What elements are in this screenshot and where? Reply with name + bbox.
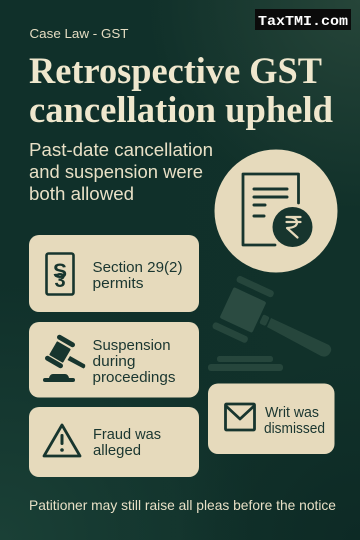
title: cancellation upheld xyxy=(29,90,333,131)
icon: gavel xyxy=(43,334,85,382)
title: Retrospective GST xyxy=(29,51,322,92)
icon: section symbol: 3 xyxy=(54,270,66,292)
card text: Suspension xyxy=(92,338,170,354)
card text: alleged xyxy=(93,443,141,459)
category label: Case Law - GST xyxy=(30,26,129,41)
title xyxy=(29,51,333,131)
icon: envelope xyxy=(226,404,254,430)
icon: warning triangle xyxy=(44,425,80,456)
watermark badge xyxy=(255,9,351,30)
card: section 29(2) xyxy=(29,235,199,312)
card text: during xyxy=(92,354,136,370)
subtitle: Past-date cancellation xyxy=(29,139,213,160)
background gavel illustration xyxy=(208,275,331,371)
subtitle: both allowed xyxy=(29,183,134,204)
card text: Writ was xyxy=(265,405,319,421)
icon: document with rupee coin xyxy=(214,150,338,272)
card text xyxy=(92,338,176,386)
card text xyxy=(92,260,182,292)
icon: section symbol xyxy=(46,254,74,294)
card text: proceedings xyxy=(92,370,176,386)
card: suspension during proceedings xyxy=(29,322,199,398)
watermark badge: TaxTMI.com xyxy=(258,14,348,30)
subtitle: and suspension were xyxy=(29,161,203,182)
icon: section symbol: S xyxy=(53,260,67,283)
card text: Fraud was xyxy=(93,427,161,443)
subtitle xyxy=(29,139,213,204)
card text: permits xyxy=(92,276,144,292)
card text: dismissed xyxy=(264,421,325,437)
card text xyxy=(264,405,325,437)
card: writ dismissed xyxy=(208,384,334,454)
card text: Section 29(2) xyxy=(92,260,182,276)
card text xyxy=(93,427,161,459)
card: fraud alleged xyxy=(29,407,199,477)
footer note: Patitioner may still raise all pleas before the notice xyxy=(29,497,336,513)
